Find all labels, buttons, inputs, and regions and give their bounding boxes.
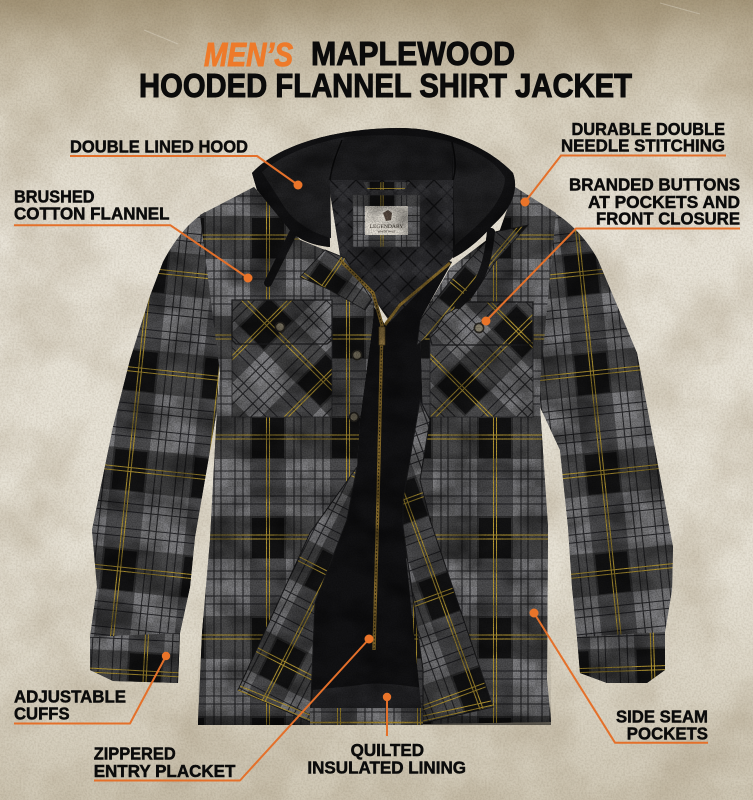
- title: MEN’S: [204, 37, 293, 74]
- callout: quilted insulated lining: QUILTED: [351, 740, 424, 760]
- callout: zippered entry placket: ENTRY PLACKET: [94, 761, 236, 781]
- callout: adjustable cuffs: ADJUSTABLE: [14, 687, 126, 707]
- neck tag: [353, 195, 420, 247]
- white brand label: LEGENDARY: [370, 224, 403, 230]
- right pocket: [430, 302, 533, 417]
- zipper: [340, 260, 450, 650]
- quilted collar interior: [328, 180, 455, 322]
- callout: branded buttons: AT POCKETS AND: [588, 192, 740, 212]
- hood drawstrings: [268, 233, 293, 283]
- right front flap: [403, 400, 493, 723]
- left body panel: [198, 187, 375, 725]
- callout: adjustable cuffs: [14, 652, 170, 724]
- title: MAPLEWOOD: [311, 36, 515, 73]
- white brand label: WHITETAILS: [378, 230, 395, 234]
- callout: adjustable cuffs: CUFFS: [14, 703, 70, 723]
- callout: zippered entry placket: ZIPPERED: [94, 743, 176, 763]
- left front flap: [238, 467, 357, 722]
- center hem band: [310, 708, 423, 725]
- left pocket: [232, 301, 332, 417]
- flap hem stitching: [238, 686, 493, 721]
- callout: branded buttons: [482, 174, 740, 326]
- jacket illustration: [90, 128, 673, 725]
- white brand label: [365, 206, 408, 235]
- callout: side seam pockets: [530, 608, 708, 743]
- right pocket flap: [428, 302, 533, 345]
- callout: brushed cotton flannel: BRUSHED: [14, 186, 94, 206]
- right sleeve: [540, 212, 673, 637]
- left cuff: [90, 633, 180, 683]
- callout: quilted insulated lining: INSULATED LINING: [307, 757, 466, 777]
- callout: side seam pockets: POCKETS: [627, 723, 708, 743]
- callout: brushed cotton flannel: [14, 186, 252, 282]
- left collar: [300, 250, 372, 310]
- hood: [252, 128, 515, 258]
- left sleeve: [90, 212, 222, 637]
- quilted lining at hem: [311, 684, 423, 710]
- callout: brushed cotton flannel: COTTON FLANNEL: [14, 203, 170, 223]
- callout: zippered entry placket: [94, 634, 373, 781]
- callout: branded buttons: BRANDED BUTTONS: [569, 174, 740, 194]
- callout: branded buttons: FRONT CLOSURE: [596, 208, 740, 228]
- right lapel: [417, 225, 528, 345]
- right body panel: [403, 187, 556, 724]
- callout: durable double needle stitching: DURABLE DOUBLE: [572, 119, 725, 139]
- hem shading: [198, 640, 551, 725]
- callout: side seam pockets: SIDE SEAM: [616, 707, 708, 727]
- black inner layer: [310, 255, 452, 725]
- title: HOODED FLANNEL SHIRT JACKET: [139, 68, 632, 105]
- right cuff: [577, 632, 665, 683]
- callout: double lined hood: DOUBLE LINED HOOD: [70, 136, 248, 156]
- collar plaid strip: [363, 182, 410, 190]
- snap buttons: [275, 322, 484, 421]
- callout: double lined hood: [70, 136, 302, 190]
- title: [139, 36, 632, 105]
- hem yellow edge: [310, 722, 423, 724]
- left pocket flap: [232, 300, 332, 344]
- callout: durable double needle stitching: NEEDLE STITCHING: [561, 136, 725, 156]
- callout: quilted insulated lining: [307, 693, 466, 777]
- callout: durable double needle stitching: [520, 119, 726, 206]
